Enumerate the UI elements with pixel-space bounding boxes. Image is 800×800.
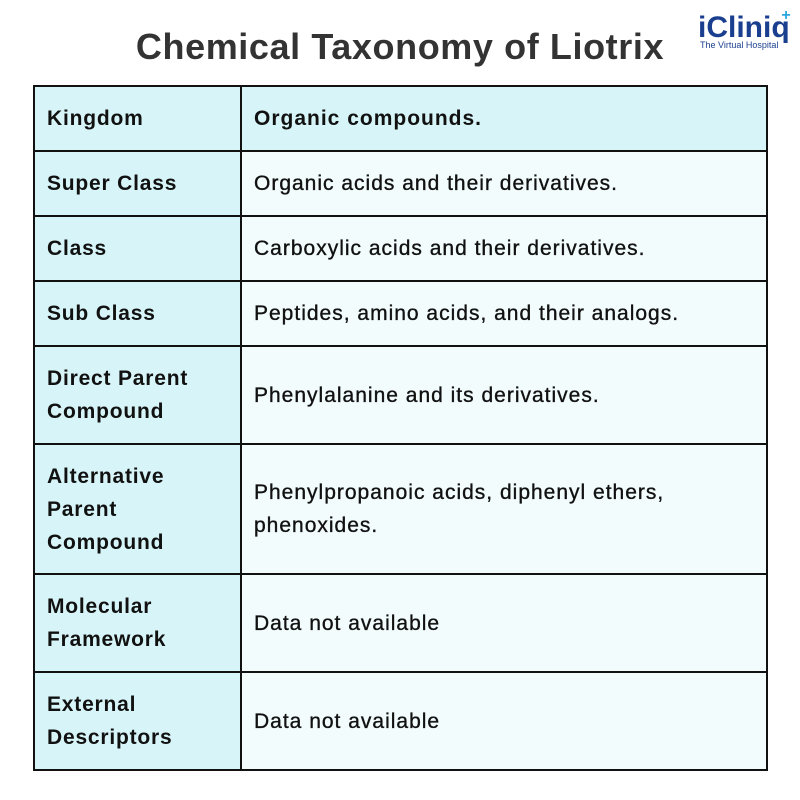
taxonomy table: Framework [47,628,166,651]
taxonomy table: Super Class [47,172,177,195]
taxonomy table: Compound [47,400,164,423]
taxonomy table: Kingdom [47,107,144,130]
taxonomy table: Data not available [254,710,440,732]
taxonomy table: Molecular [47,595,152,618]
taxonomy table: Parent [47,498,117,520]
taxonomy table: Data not available [254,612,440,634]
taxonomy table: Sub Class [47,302,156,325]
taxonomy table [33,85,768,771]
taxonomy table: External [47,693,136,716]
taxonomy table: Organic acids and their derivatives. [254,172,618,195]
logo: iCliniq: The Virtual Hospital [700,40,778,50]
taxonomy table: Direct Parent [47,367,188,390]
taxonomy table: Class [47,237,107,260]
taxonomy table: Peptides, amino acids, and their analogs. [254,302,679,325]
taxonomy table: Carboxylic acids and their derivatives. [254,237,646,260]
taxonomy table: phenoxides. [254,514,378,537]
taxonomy table: Phenylpropanoic acids, diphenyl ethers, [254,481,664,504]
taxonomy table: Descriptors [47,726,173,749]
logo: iCliniq: iCliniq [698,11,790,44]
taxonomy table: Organic compounds. [254,107,482,130]
taxonomy table: Compound [47,530,164,554]
taxonomy table: Phenylalanine and its derivatives. [254,384,600,406]
taxonomy table: Alternative [47,464,164,488]
title: Chemical Taxonomy of Liotrix [136,26,664,67]
logo: iCliniq: + [781,7,791,24]
